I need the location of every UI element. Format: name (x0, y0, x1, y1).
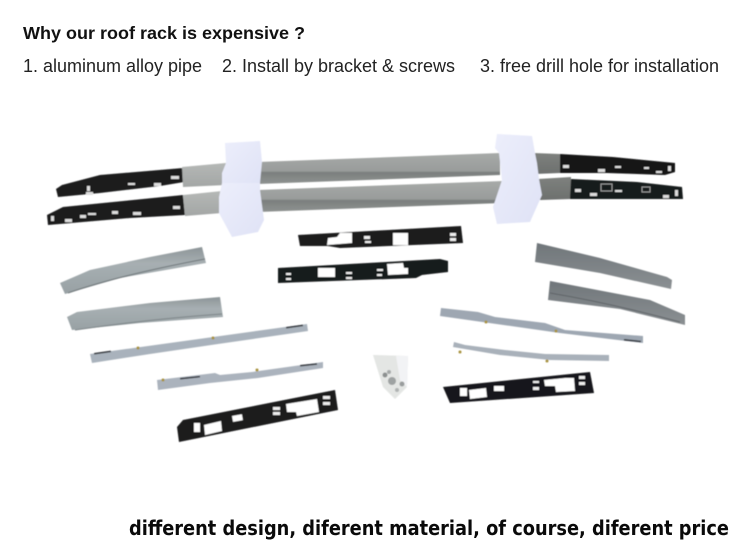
title: Why our roof rack is expensive ? (23, 23, 305, 43)
feature 3: 3. free drill hole for installation (480, 55, 719, 76)
left black plate (177, 390, 338, 442)
left cover fin lower (67, 297, 223, 330)
feature 1: 1. aluminum alloy pipe (23, 55, 202, 76)
right rear grey sleeve (533, 153, 560, 174)
left rear grey sleeve (182, 163, 226, 187)
feature 2: 2. Install by bracket & screws (222, 55, 455, 76)
right foam block (493, 134, 542, 224)
right metal strip upper (440, 308, 643, 343)
left rear black end (56, 168, 184, 197)
left cover fin upper (60, 247, 206, 294)
assembled roof rails with foam (47, 134, 683, 237)
center black bracket upper (298, 226, 463, 248)
left metal strip upper (90, 324, 308, 363)
left foam block (219, 141, 264, 237)
right metal strip lower (453, 342, 609, 362)
product parts photo (47, 134, 685, 442)
left metal strip lower (157, 362, 323, 390)
right rear black end (560, 154, 675, 175)
rear long rail (258, 153, 500, 184)
right front black end (570, 179, 683, 199)
feature list (23, 55, 719, 76)
right cover fin upper (535, 243, 672, 289)
right front grey sleeve (538, 177, 571, 200)
right black plate (443, 372, 594, 403)
left front grey sleeve (183, 191, 222, 216)
hardware bag (373, 355, 408, 399)
left front black end (47, 195, 185, 225)
front long rail (258, 181, 503, 212)
right cover fin lower (548, 281, 685, 325)
center black bracket lower (278, 259, 448, 283)
